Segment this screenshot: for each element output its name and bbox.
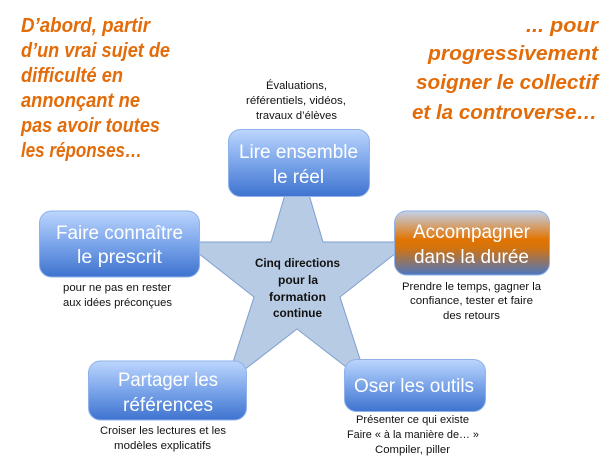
box: Partager les références: Partager les	[118, 370, 218, 391]
caption: Lire ensemble le réel: travaux d’élèves	[256, 110, 337, 122]
box: Oser les outils	[344, 360, 486, 412]
caption: Oser les outils: Faire « à la manière de… »	[347, 429, 479, 441]
box: Lire ensemble le réel	[228, 130, 370, 196]
caption: Faire connaître le prescrit: pour ne pas en rester	[63, 282, 171, 294]
caption: Accompagner dans la durée	[402, 281, 542, 322]
box: Faire connaître le prescrit: Faire connaître	[56, 223, 183, 244]
heading: right orange text	[412, 15, 600, 124]
heading: left orange text: difficulté en	[21, 65, 123, 87]
caption: Partager les références	[100, 425, 226, 452]
heading: left orange text: D’abord, partir	[21, 15, 151, 37]
caption: Lire ensemble le réel: Évaluations,	[266, 79, 327, 92]
caption: Accompagner dans la durée: des retours	[443, 310, 501, 322]
star centre label: Cinq directions	[255, 258, 340, 270]
box: Accompagner dans la durée	[394, 211, 550, 275]
caption: Lire ensemble le réel	[246, 79, 346, 122]
heading: right orange text: ... pour	[526, 15, 599, 37]
box: Faire connaître le prescrit	[40, 211, 200, 277]
heading: left orange text	[20, 15, 170, 162]
caption: Accompagner dans la durée: Prendre le temps, gagner la	[402, 281, 542, 293]
caption: Oser les outils: Présenter ce qui existe	[356, 414, 469, 426]
box: Partager les références	[88, 361, 246, 420]
caption: Partager les références: Croiser les lectures et les	[100, 425, 226, 437]
star centre label	[255, 258, 340, 320]
heading: left orange text: pas avoir toutes	[20, 115, 160, 137]
box: Accompagner dans la durée: Accompagner	[413, 222, 531, 243]
box: Accompagner dans la durée: dans la durée	[414, 247, 529, 268]
caption: Partager les références: modèles explicatifs	[114, 440, 212, 452]
box: Lire ensemble le réel: le réel	[273, 167, 324, 188]
caption: Accompagner dans la durée: confiance, tester et faire	[410, 295, 533, 307]
box: Lire ensemble le réel: Lire ensemble	[239, 142, 358, 163]
star shape	[184, 154, 410, 384]
heading: right orange text: et la controverse…	[412, 102, 597, 124]
caption: Faire connaître le prescrit	[63, 282, 173, 309]
heading: right orange text: soigner le collectif	[416, 72, 600, 94]
heading: left orange text: annonçant ne	[21, 90, 140, 112]
box: Faire connaître le prescrit: le prescrit	[77, 247, 163, 268]
caption: Lire ensemble le réel: référentiels, vidéos,	[246, 95, 346, 107]
star centre label: pour la	[278, 275, 319, 287]
heading: left orange text: les réponses…	[21, 140, 142, 162]
caption: Oser les outils: Compiler, piller	[375, 444, 450, 456]
heading: right orange text: progressivement	[427, 43, 599, 65]
caption: Faire connaître le prescrit: aux idées préconçues	[63, 297, 173, 309]
star centre label: continue	[273, 308, 322, 320]
star centre label: formation	[269, 292, 326, 304]
box: Oser les outils: Oser les outils	[354, 376, 474, 397]
caption: Oser les outils	[347, 414, 479, 456]
box: Partager les références: références	[123, 395, 213, 416]
heading: left orange text: d’un vrai sujet de	[21, 40, 170, 62]
